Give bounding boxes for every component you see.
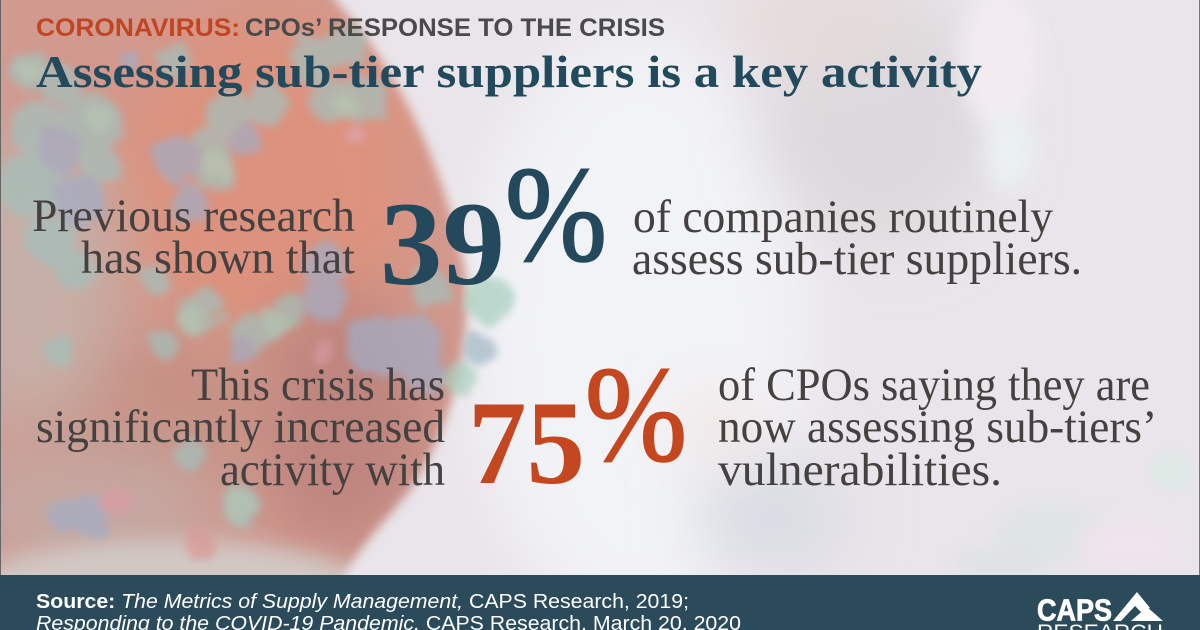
text: this crisis: This crisis has [191, 359, 445, 411]
text: companies assess sub-tier suppliers: of companies routinely [633, 191, 1053, 243]
text: this crisis: activity with [220, 444, 445, 496]
source citation [36, 591, 741, 630]
virus spikes [0, 23, 514, 561]
logo: CAPS Research: CAPS [1037, 592, 1112, 628]
virus sphere [1, 0, 473, 575]
text: CPOs assessing vulnerabilities: of CPOs saying they are [718, 359, 1150, 411]
source citation: Source: The Metrics of Supply Management, CAPS Research, 2019; [36, 591, 689, 613]
text: this crisis: significantly increased [36, 401, 445, 453]
text: companies assess sub-tier suppliers [632, 191, 1082, 285]
eyebrow heading: CORONAVIRUS: [36, 14, 240, 42]
statistic: 39 percent: % [505, 140, 607, 290]
title: Assessing sub-tier suppliers is a key activity [36, 46, 982, 97]
text: previous research [32, 190, 355, 284]
statistic: 39 percent: 39 [380, 177, 505, 310]
statistic: 75 percent [468, 340, 687, 509]
text: CPOs assessing vulnerabilities: now assessing sub-tiers’ [718, 401, 1157, 453]
logo: CAPS Research [1037, 592, 1163, 630]
text: this crisis [36, 359, 445, 496]
text: CPOs assessing vulnerabilities: vulnerabilities. [718, 444, 1002, 496]
eyebrow heading [36, 14, 665, 42]
footer bar [0, 575, 1200, 630]
eyebrow heading: CPOs’ RESPONSE TO THE CRISIS [245, 14, 665, 42]
text: companies assess sub-tier suppliers: assess sub-tier suppliers. [632, 233, 1082, 285]
text: CPOs assessing vulnerabilities [718, 359, 1157, 496]
text: previous research: has shown that [81, 232, 355, 284]
statistic: 75 percent: % [585, 340, 687, 490]
statistic: 39 percent [380, 140, 607, 310]
statistic: 75 percent: 75 [468, 376, 585, 509]
text: previous research: Previous research [32, 190, 355, 242]
